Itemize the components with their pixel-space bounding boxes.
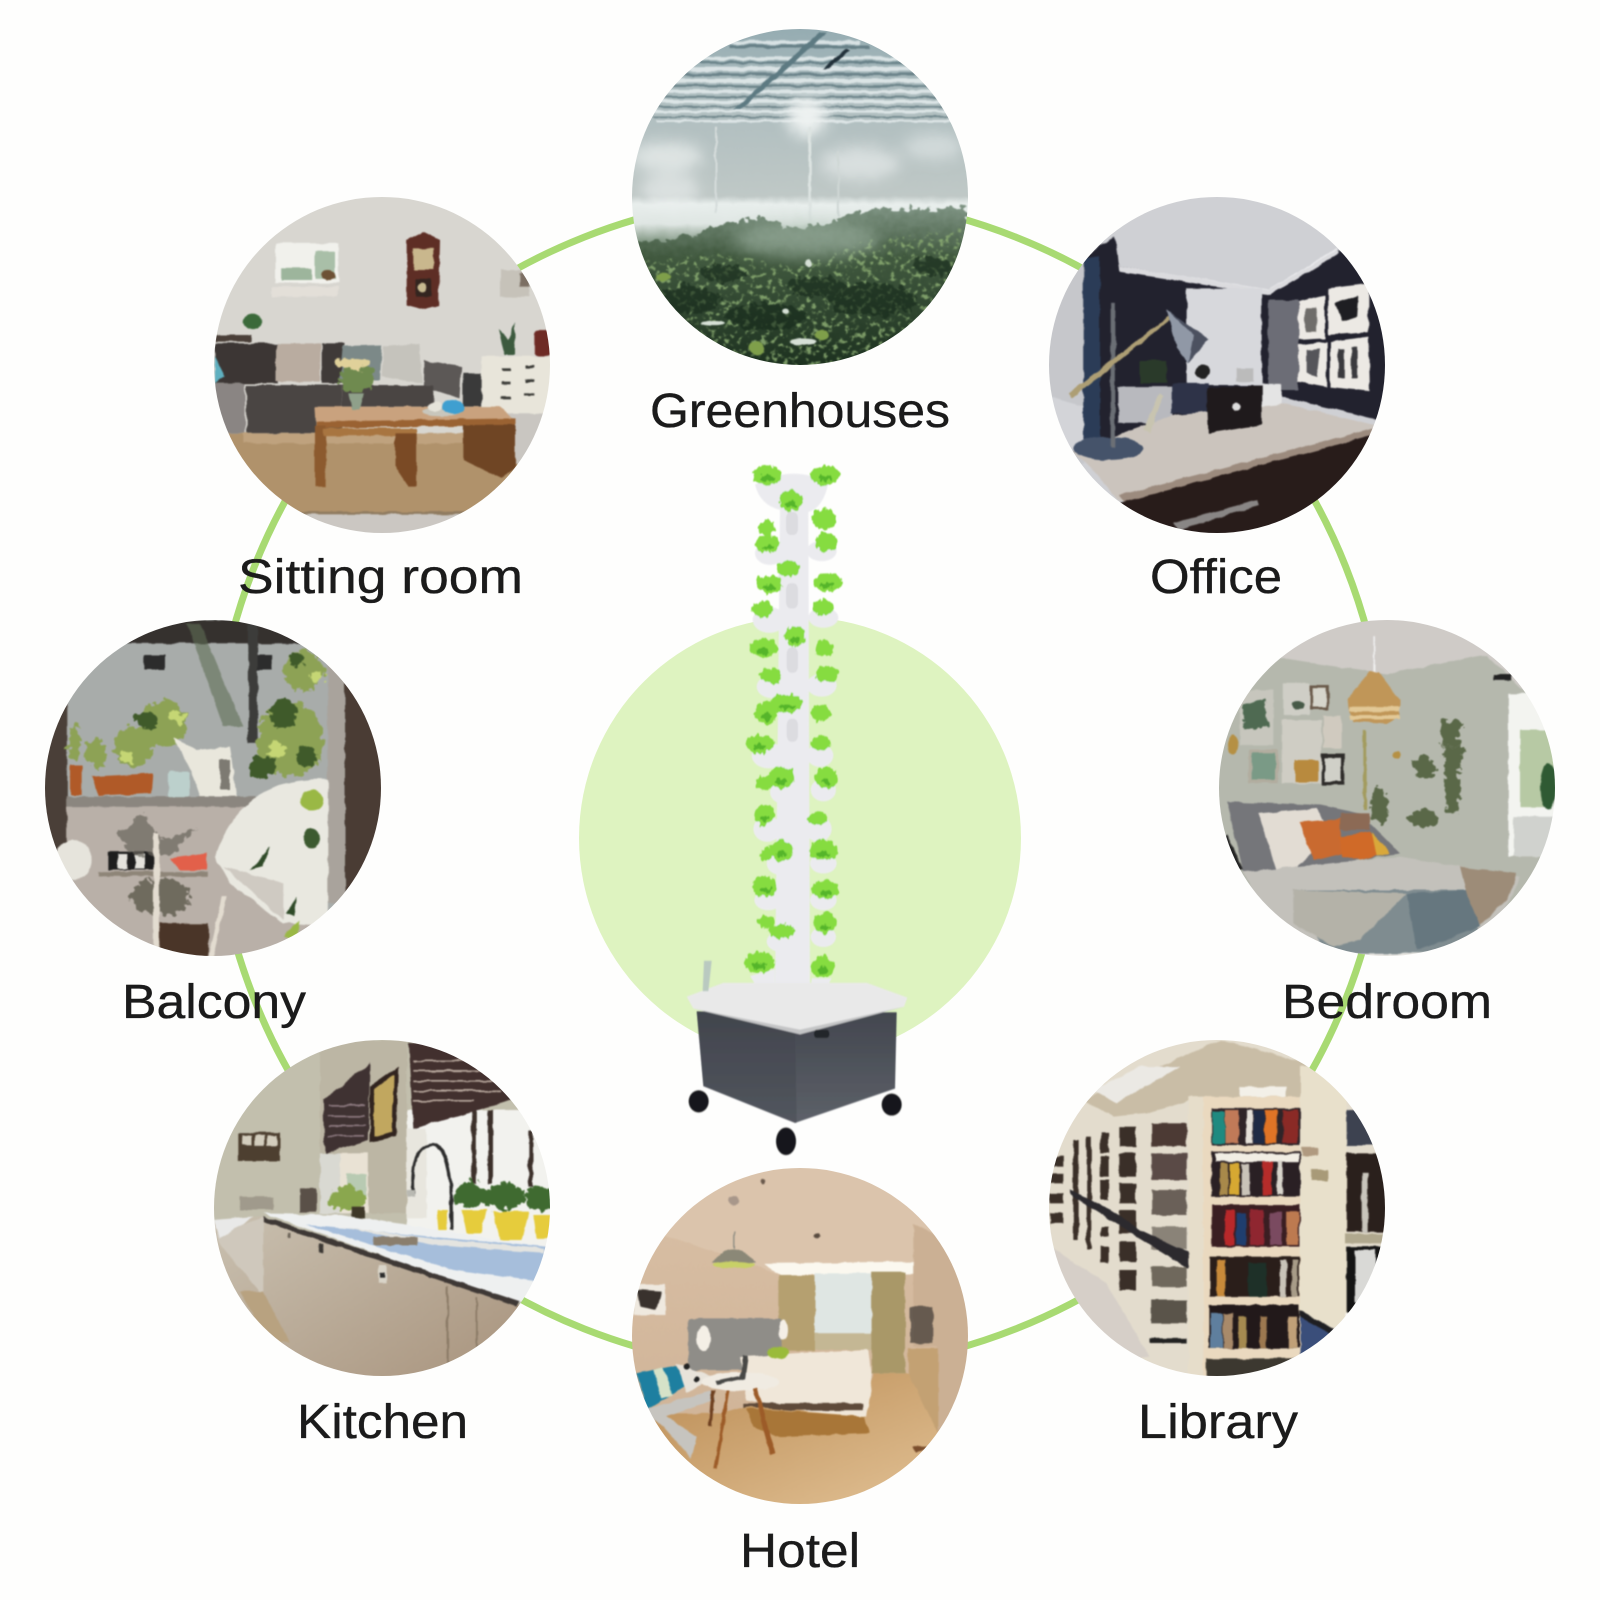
far shelves	[1050, 1127, 1136, 1290]
label: Kitchen: Kitchen	[297, 1396, 468, 1449]
label: Hotel: Hotel	[740, 1525, 860, 1578]
photo: greenhouse interior	[632, 29, 968, 365]
panel: Greenhouses	[632, 29, 968, 428]
panel: Hotel	[632, 1168, 968, 1568]
tower column and pots	[750, 474, 838, 999]
label: Bedroom: Bedroom	[1282, 976, 1492, 1029]
panel: Sitting room	[214, 197, 550, 604]
photo: bedroom	[1219, 620, 1555, 956]
photo: kitchen	[214, 1040, 550, 1376]
panel: Library	[1049, 1040, 1385, 1448]
panel: Office	[1049, 197, 1385, 594]
photo: sitting room	[214, 197, 550, 533]
label: Library: Library	[1138, 1396, 1298, 1449]
tower planter product	[687, 467, 907, 1155]
connecting ring	[213, 196, 1387, 1370]
lettuce clusters	[745, 467, 841, 977]
label: Office: Office	[1150, 551, 1282, 604]
antenna	[703, 961, 712, 991]
near shelf books	[1207, 1108, 1300, 1378]
photo: hotel room	[632, 1168, 968, 1504]
photo: office	[1049, 197, 1385, 533]
label: Balcony: Balcony	[122, 976, 306, 1029]
label: Sitting room: Sitting room	[238, 551, 523, 604]
reservoir box	[697, 1011, 897, 1123]
panel: Balcony	[45, 620, 381, 1028]
label: Greenhouses: Greenhouses	[650, 385, 950, 438]
photo: balcony	[45, 620, 381, 956]
casters	[689, 1090, 709, 1112]
panel: Kitchen	[214, 1040, 550, 1439]
central green disc	[579, 617, 1021, 1059]
photo: library	[1049, 1040, 1385, 1376]
panel: Bedroom	[1219, 620, 1555, 1019]
